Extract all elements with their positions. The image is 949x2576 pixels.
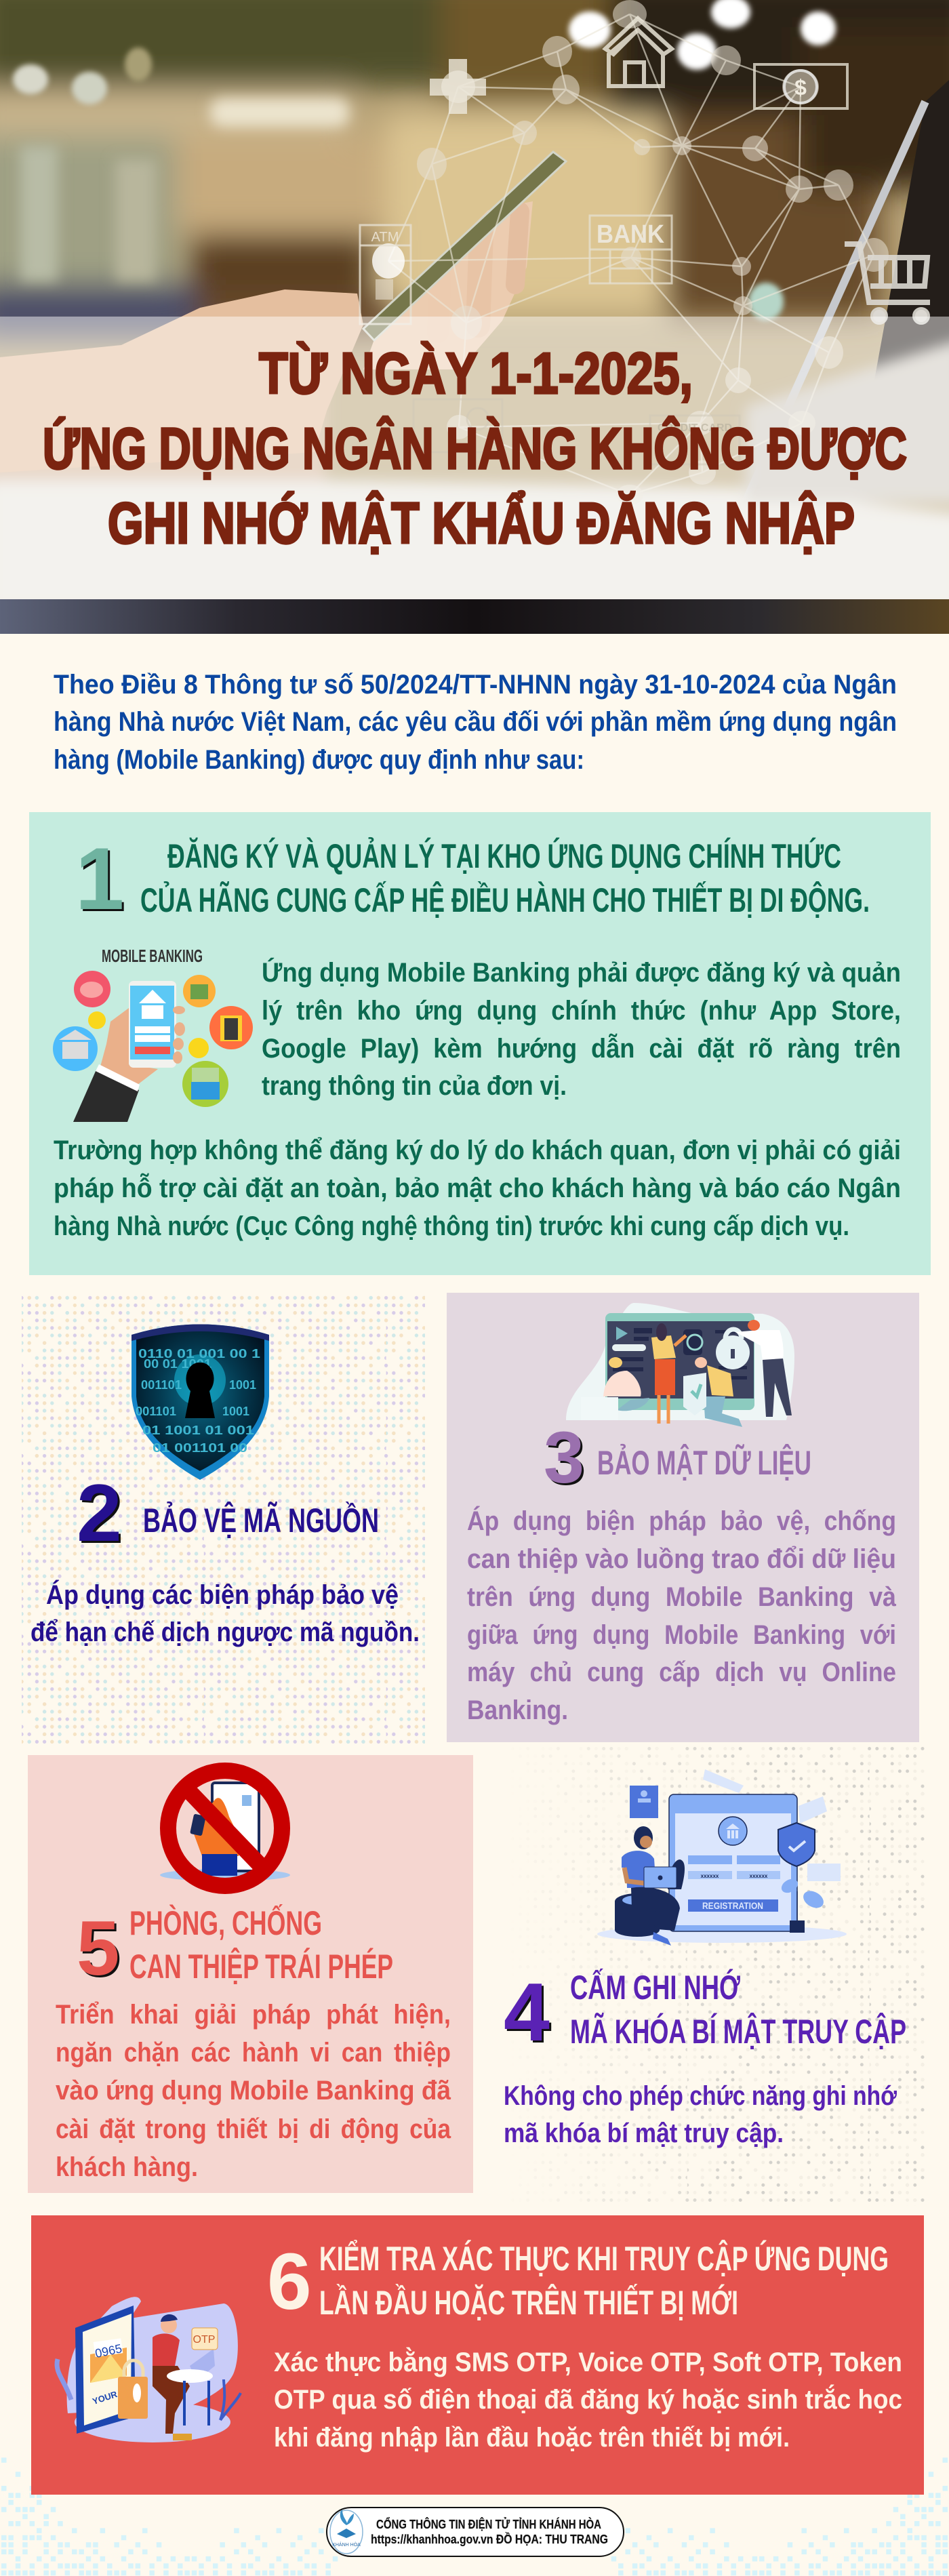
- title: TỪ NGÀY 1-1-2025,: [259, 342, 693, 406]
- icon: shield keyhole: 01 1001 01 001: [142, 1424, 254, 1437]
- icon: shield keyhole: 001101: [141, 1378, 182, 1392]
- illustration: OTP: [57, 2297, 241, 2442]
- text 2: Áp dụng các biện pháp bảo vệ: [46, 1579, 399, 1610]
- network lines and nodes: [372, 0, 889, 505]
- icon: shield keyhole: 01 001101 00: [153, 1441, 247, 1455]
- number 4: 4: [504, 1966, 550, 2058]
- text 4: [504, 2081, 897, 2148]
- text 6: OTP qua số điện thoại đã đăng ký hoặc sinh trắc học: [274, 2383, 902, 2415]
- number 5: 5: [77, 1906, 119, 1992]
- number 6: 6: [267, 2237, 312, 2327]
- intro text: hàng (Mobile Banking) được quy định như sau:: [54, 745, 584, 775]
- icon: shield keyhole: 1001: [229, 1378, 256, 1392]
- text 5: cài đặt trong thiết bị di động của: [56, 2114, 451, 2144]
- text 3: can thiệp vào luồng trao đổi dữ liệu: [467, 1544, 896, 1574]
- footer text: CỔNG THÔNG TIN ĐIỆN TỬ TỈNH KHÁNH HÒA: [376, 2517, 601, 2531]
- icon: shield keyhole: 001101: [136, 1405, 176, 1418]
- illustration: team securing data: [566, 1303, 794, 1427]
- icon: Khánh Hòa logo: [330, 2510, 363, 2554]
- dot background: section 2: [22, 1294, 425, 1745]
- panel: 1 register on official stores: [29, 812, 931, 1275]
- woman: [651, 1335, 676, 1359]
- intro text: [54, 670, 897, 775]
- text 1a: Ứng dụng Mobile Banking phải được đăng ký và quản: [262, 957, 901, 988]
- icon: prohibited hacker: [160, 1771, 290, 1886]
- text 1b: hàng Nhà nước (Cục Công nghệ thông tin) trước khi cung cấp dịch vụ.: [54, 1211, 849, 1241]
- heading 6: [319, 2240, 889, 2322]
- text 1b: pháp hỗ trợ cài đặt an toàn, bảo mật cho khách hàng và báo cáo Ngân: [54, 1172, 901, 1203]
- illustration: registration: REGISTRATION: [702, 1900, 763, 1911]
- banner overlay: [0, 317, 949, 599]
- heading 5: CAN THIỆP TRÁI PHÉP: [129, 1948, 393, 1986]
- icon: credit card: CREDIT CARD: [658, 422, 732, 434]
- bottom pixel pattern: [1, 2457, 948, 2575]
- icon: shield keyhole: 0110 01 001 00 1: [138, 1347, 260, 1361]
- text 1a: trang thông tin của đơn vị.: [262, 1071, 567, 1101]
- text 3: trên ứng dụng Mobile Banking và: [467, 1582, 897, 1612]
- icon: BANK: BANK: [597, 220, 664, 249]
- text 3: [467, 1506, 897, 1725]
- icon: shopping cart: [845, 244, 930, 322]
- icon: shield keyhole: 1001: [222, 1405, 249, 1418]
- icon: credit card: [650, 416, 740, 464]
- intro text: Theo Điều 8 Thông tư số 50/2024/TT-NHNN ngày 31-10-2024 của Ngân: [54, 670, 897, 700]
- footer text: https://khanhhoa.gov.vn ĐỒ HỌA: THU TRANG: [371, 2532, 608, 2546]
- hand: [0, 152, 566, 472]
- icon: house: [605, 18, 672, 86]
- icon: shield keyhole: [132, 1325, 269, 1480]
- panel: 6 authentication: [31, 2215, 924, 2495]
- text 1a: [262, 957, 901, 1101]
- text 1a: Google Play) kèm hướng dẫn cài đặt rõ ràng trên: [262, 1032, 901, 1064]
- icon: cross: [430, 59, 486, 114]
- title: [43, 342, 907, 556]
- laptop screen: [746, 80, 949, 502]
- number 5: 5: [79, 1908, 121, 1994]
- heading 6: LẦN ĐẦU HOẶC TRÊN THIẾT BỊ MỚI: [319, 2284, 738, 2322]
- shield person: [707, 1365, 733, 1396]
- icon: ATM: [360, 225, 411, 324]
- text 4: mã khóa bí mật truy cập.: [504, 2118, 784, 2148]
- icon: person card: [460, 399, 503, 427]
- keyboard: [0, 339, 949, 610]
- illustration: mobile banking: [53, 946, 253, 1122]
- text 6: khi đăng nhập lần đầu hoặc trên thiết bị mới.: [274, 2423, 790, 2453]
- number 3: 3: [544, 1416, 584, 1498]
- heading 5: PHÒNG, CHỐNG: [129, 1904, 322, 1942]
- text 5: ngăn chặn các hành vi can thiệp: [56, 2038, 451, 2068]
- illustration: registration: [597, 1769, 847, 1946]
- text 5: khách hàng.: [56, 2152, 198, 2182]
- text 5: [56, 2000, 451, 2182]
- illustration: registration: xxxxxx: [750, 1873, 768, 1879]
- text 3: máy chủ cung cấp dịch vụ Online: [467, 1657, 896, 1687]
- illustration: OTP: 0965: [94, 2341, 123, 2360]
- heading 2: BẢO VỆ MÃ NGUỒN: [143, 1502, 379, 1539]
- hero bottom strip: [0, 599, 949, 634]
- number 2: 2: [79, 1470, 124, 1561]
- left person: [603, 1371, 641, 1396]
- dot background: section 4: [557, 1747, 925, 2202]
- panel: 2 protect source code: [31, 1325, 420, 1647]
- icon: ATM: ATM: [371, 230, 399, 245]
- text 6: Xác thực bằng SMS OTP, Voice OTP, Soft OTP, Token: [274, 2346, 902, 2377]
- panel: 3 data security: [447, 1293, 919, 1742]
- illustration: OTP: YOUR CODE: [91, 2380, 145, 2407]
- illustration: registration: xxxxxx: [701, 1873, 719, 1879]
- icon: dollar bill: [754, 64, 847, 108]
- footer text: [371, 2517, 608, 2546]
- hero photo: hand holding phone with banking network: [0, 0, 949, 634]
- footer credit pill: [327, 2508, 624, 2556]
- number 2: 2: [77, 1468, 122, 1558]
- number 1: 1: [75, 829, 124, 928]
- heading 5: [129, 1904, 393, 1986]
- number 1: 1: [77, 831, 126, 930]
- heading 3: BẢO MẬT DỮ LIỆU: [597, 1443, 811, 1482]
- panel: 5 prevent tampering: [28, 1755, 473, 2193]
- icon: Khánh Hòa logo: KHÁNH HÒA: [332, 2541, 361, 2548]
- text 1b: [54, 1135, 901, 1241]
- icon: shield keyhole: 00 01 1001: [144, 1357, 211, 1371]
- illustration: OTP: OTP: [193, 2334, 215, 2346]
- heading 4: [570, 1969, 906, 2051]
- text 2: để hạn chế dịch ngược mã nguồn.: [31, 1617, 420, 1647]
- heading 4: CẤM GHI NHỚ: [570, 1969, 740, 2007]
- text 2: [31, 1579, 420, 1647]
- text 3: Banking.: [467, 1695, 568, 1725]
- text 3: Áp dụng biện pháp bảo vệ, chống: [467, 1506, 896, 1536]
- illustration: mobile banking: MOBILE BANKING: [102, 946, 203, 966]
- text 6: [274, 2346, 902, 2453]
- number 4: 4: [506, 1968, 552, 2060]
- text 5: Triển khai giải pháp phát hiện,: [56, 2000, 451, 2030]
- number 3: 3: [546, 1418, 586, 1500]
- icon: BANK: [590, 216, 672, 283]
- text 5: vào ứng dụng Mobile Banking đã: [56, 2076, 451, 2106]
- text 1a: lý trên kho ứng dụng chính thức (như App Store,: [262, 996, 901, 1026]
- panel: 4 no credential memory: [504, 1769, 906, 2148]
- heading 1: [140, 837, 870, 919]
- icon: dollar bill: $: [794, 75, 807, 100]
- man with lock: [716, 1335, 750, 1369]
